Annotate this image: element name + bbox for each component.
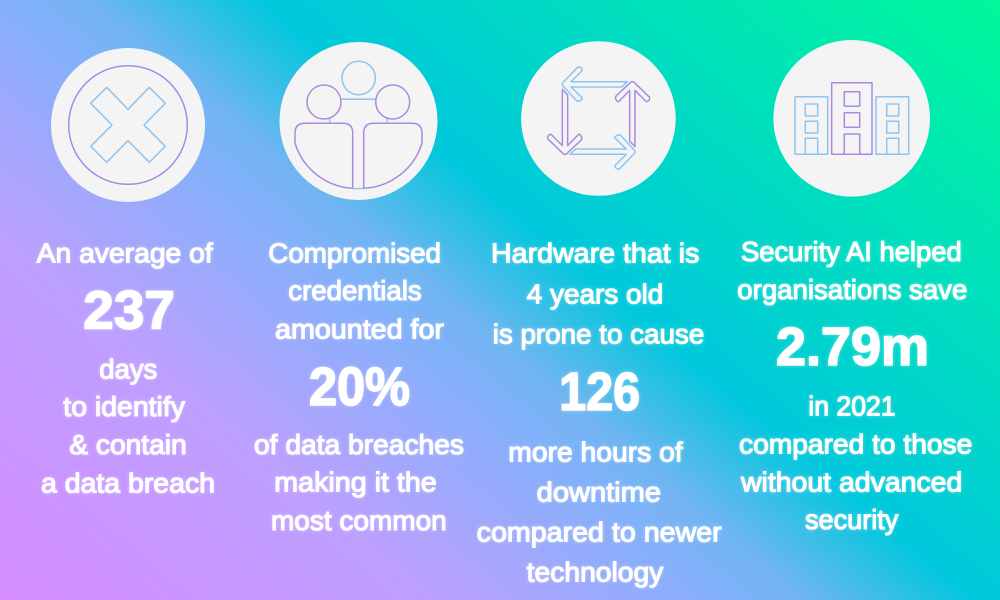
text: compromised credentials statistic: credentials (288, 275, 422, 306)
text: security AI savings statistic: security (805, 504, 898, 535)
text: hardware downtime statistic: compared to newer (477, 517, 722, 548)
text: hardware downtime statistic: downtime (537, 477, 661, 508)
panel: time to identify a breach (37, 48, 215, 498)
icon: cross in circle (51, 48, 205, 202)
icon: three people (280, 42, 438, 200)
text: security AI savings statistic: Security AI helped (741, 236, 962, 267)
text: security AI savings statistic: compared to those (739, 428, 972, 459)
text: days to identify and contain: 237 (83, 281, 175, 341)
text: hardware downtime statistic: is prone to cause (493, 318, 704, 349)
text: security AI savings statistic: 2.79m (776, 317, 929, 377)
text: hardware downtime statistic: more hours of (508, 437, 683, 468)
text: days to identify and contain: days (99, 353, 157, 384)
text: security AI savings statistic: in 2021 (808, 391, 896, 422)
text: compromised credentials statistic: amounted for (275, 313, 444, 344)
text: compromised credentials statistic: of data breaches (254, 429, 464, 460)
text: compromised credentials statistic: most common (271, 505, 447, 536)
text: hardware downtime statistic: technology (527, 557, 663, 588)
text: security AI savings statistic: organisations save (737, 274, 967, 305)
text: security AI savings statistic: without advanced (740, 467, 962, 498)
text: days to identify and contain: a data breach (41, 467, 215, 498)
panel: aging hardware (477, 41, 722, 588)
text: days to identify and contain: to identify (63, 391, 185, 422)
icon: four cycling arrows (521, 41, 676, 196)
text: compromised credentials statistic (254, 237, 464, 536)
text: hardware downtime statistic: 126 (559, 362, 640, 422)
text: compromised credentials statistic: making it the (274, 467, 437, 498)
text: compromised credentials statistic: 20% (309, 357, 410, 417)
panel: security AI savings (737, 40, 972, 535)
text: security AI savings statistic (737, 236, 972, 535)
text: compromised credentials statistic: Compromised (268, 237, 441, 268)
panel: compromised credentials (254, 42, 464, 536)
text: hardware downtime statistic (477, 238, 722, 588)
text: hardware downtime statistic: Hardware that is (491, 238, 699, 269)
text: hardware downtime statistic: 4 years old (527, 278, 663, 309)
icon: office buildings (773, 40, 930, 197)
text: days to identify and contain (37, 238, 215, 498)
text: days to identify and contain: & contain (69, 429, 187, 460)
text: days to identify and contain: An average of (37, 238, 213, 269)
